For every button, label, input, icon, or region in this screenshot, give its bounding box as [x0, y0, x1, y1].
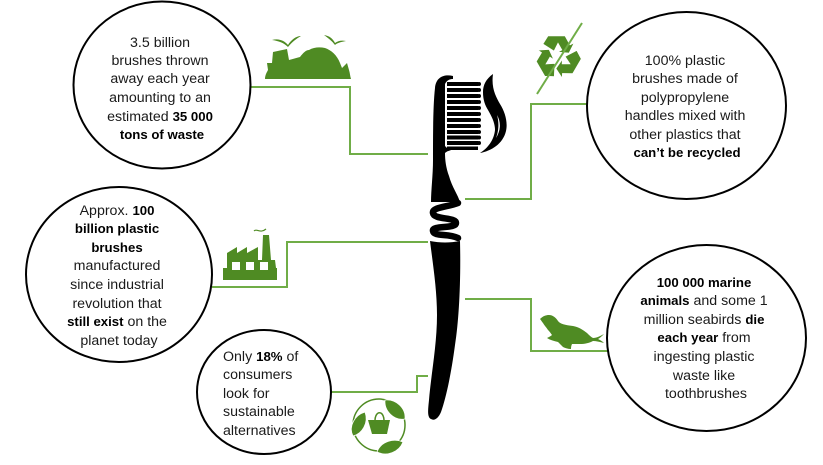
text: manufacturing fact: since industrial: [70, 277, 164, 293]
text: recycling fact: 100% plastic: [645, 53, 725, 69]
text: manufacturing fact: Approx. 100: [80, 203, 154, 219]
text: consumers fact: sustainable: [223, 404, 295, 420]
text: recycling fact: can’t be recycled: [633, 145, 741, 160]
text: manufacturing fact: still exist on the: [67, 314, 167, 330]
smoke: [254, 229, 266, 231]
bag handle: [375, 413, 384, 421]
text: consumers fact: alternatives: [223, 423, 296, 439]
connector: factory circle to brush: [212, 242, 428, 287]
icon: landfill: [265, 35, 351, 79]
panel: recycling: [587, 12, 786, 199]
text: waste fact: tons of waste: [120, 127, 204, 142]
panel: marine life: [607, 245, 806, 431]
icon: toothpaste: [480, 74, 507, 153]
icon: toothbrush: [428, 75, 481, 420]
icon: recycling symbol crossed out: [532, 23, 584, 94]
text: recycling fact: brushes made of: [632, 71, 738, 87]
icon: seal: [540, 315, 604, 349]
handle: [428, 241, 460, 420]
text: waste fact: 3.5 billion: [130, 35, 190, 51]
spring: [433, 203, 458, 238]
text: waste fact: brushes thrown: [112, 53, 209, 69]
panel: waste: [74, 2, 250, 168]
leaf: left: [351, 412, 366, 436]
text: waste fact: amounting to an: [109, 90, 211, 106]
text: marine fact: million seabirds die: [644, 312, 764, 328]
text: marine fact: toothbrushes: [665, 386, 747, 402]
icon: shopping bag with leaves: [351, 399, 405, 454]
text: marine fact: waste like: [672, 368, 735, 384]
text: waste fact: estimated 35 000: [107, 109, 213, 125]
text: manufacturing fact: billion plastic: [75, 221, 159, 236]
text: consumers fact: look for: [223, 386, 270, 402]
bag: [368, 420, 390, 434]
text: marine fact: ingesting plastic: [654, 349, 754, 365]
text: manufacturing fact: manufactured: [74, 258, 160, 274]
panel: manufacturing: [26, 187, 212, 362]
text: recycling fact: handles mixed with: [625, 108, 745, 124]
text: marine fact: 100 000 marine: [657, 275, 751, 290]
connector: marine circle to brush: [465, 299, 608, 351]
text: manufacturing fact: planet today: [80, 333, 159, 349]
text: marine fact: animals and some 1: [640, 293, 768, 309]
icon: factory: [223, 229, 277, 280]
leaf: top right: [385, 400, 405, 419]
leaf: bottom: [377, 440, 403, 454]
connector: waste circle to brush: [250, 87, 428, 154]
bristles: [447, 82, 481, 150]
text: manufacturing fact: revolution that: [72, 296, 162, 312]
brush head and neck: [431, 75, 460, 202]
text: recycling fact: other plastics that: [629, 127, 741, 143]
text: marine fact: each year from: [657, 330, 751, 346]
text: waste fact: away each year: [110, 71, 210, 87]
text: consumers fact: consumers: [223, 367, 292, 383]
connector: consumers circle to brush: [331, 376, 428, 392]
text: consumers fact: Only 18% of: [223, 349, 298, 365]
text: manufacturing fact: brushes: [91, 240, 143, 255]
text: recycling fact: polypropylene: [641, 90, 729, 106]
connector: recycling circle to brush: [465, 104, 588, 199]
strike-through line: [537, 23, 582, 94]
panel: consumers: [197, 330, 331, 454]
